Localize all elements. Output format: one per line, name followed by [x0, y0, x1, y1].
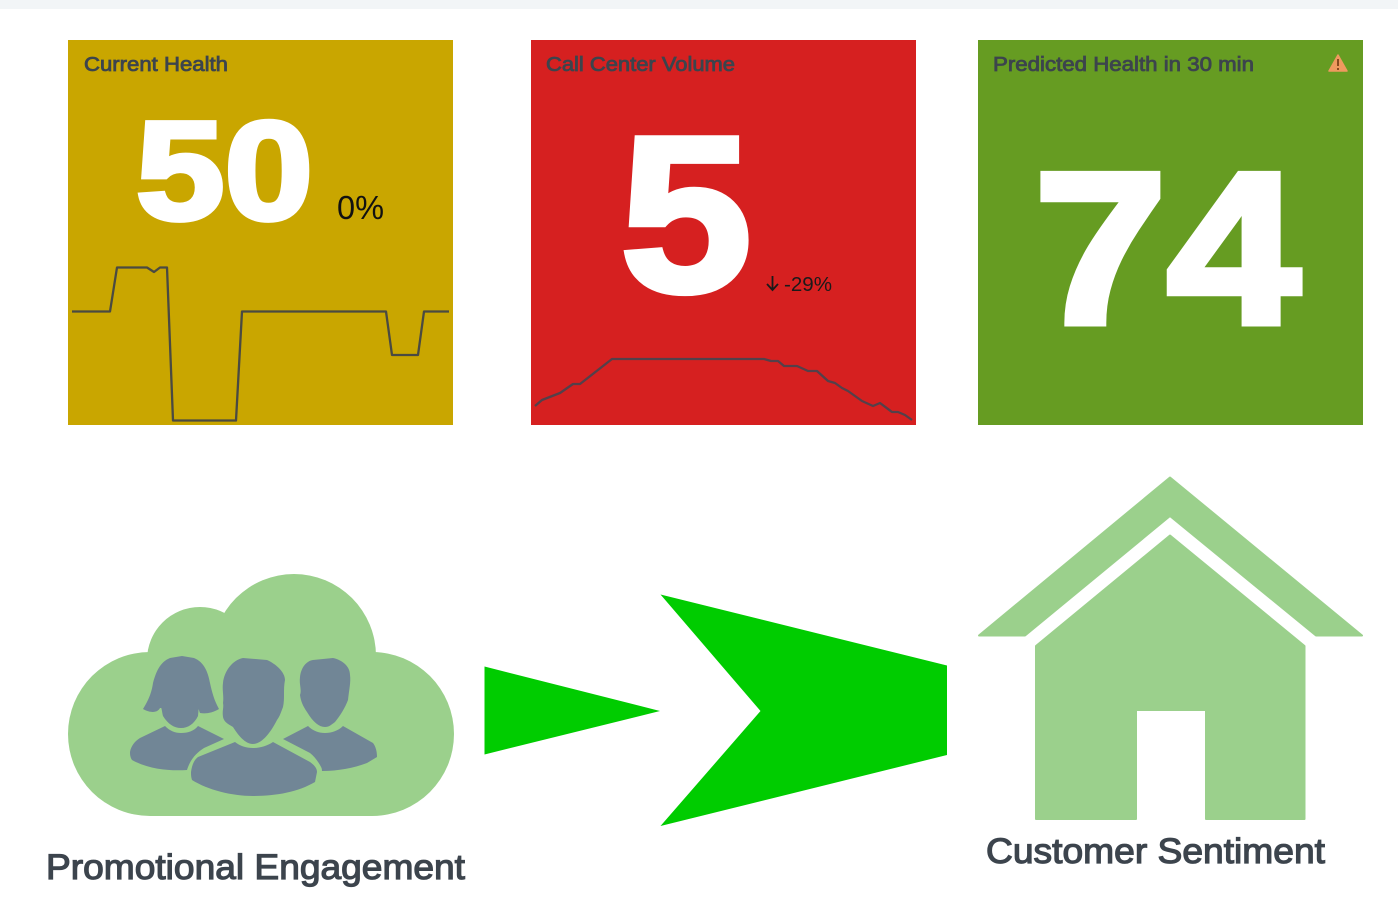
sparkline: current health [72, 268, 449, 420]
panel: predicted health [978, 40, 1363, 425]
label: customer sentiment: Customer Sentiment [986, 832, 1325, 871]
panel: current health [68, 40, 453, 425]
metric value: 74: 74 [1034, 127, 1300, 369]
people silhouettes [130, 656, 377, 796]
sparkline: call center volume [535, 359, 912, 420]
icon: warning triangle [1329, 55, 1347, 71]
label: promotional engagement: Promotional Engagement [46, 848, 465, 887]
arrow: green chevron [484, 594, 947, 826]
metric change: -29%: -29% [784, 274, 832, 296]
metric value: 50: 50 [136, 92, 313, 249]
icon: house [979, 478, 1362, 819]
cloud shape [68, 574, 454, 816]
icon: people in cloud [68, 574, 454, 816]
house roof [979, 478, 1362, 636]
heading: call center volume: Call Center Volume [546, 54, 735, 76]
metric value: 5: 5 [620, 91, 752, 339]
heading: predicted health in 30 min: Predicted Health in 30 min [993, 54, 1254, 76]
heading: current health: Current Health [84, 54, 228, 76]
metric change: 0%: 0% [337, 189, 384, 226]
house body [1036, 536, 1304, 819]
panel: call center volume [531, 40, 916, 425]
